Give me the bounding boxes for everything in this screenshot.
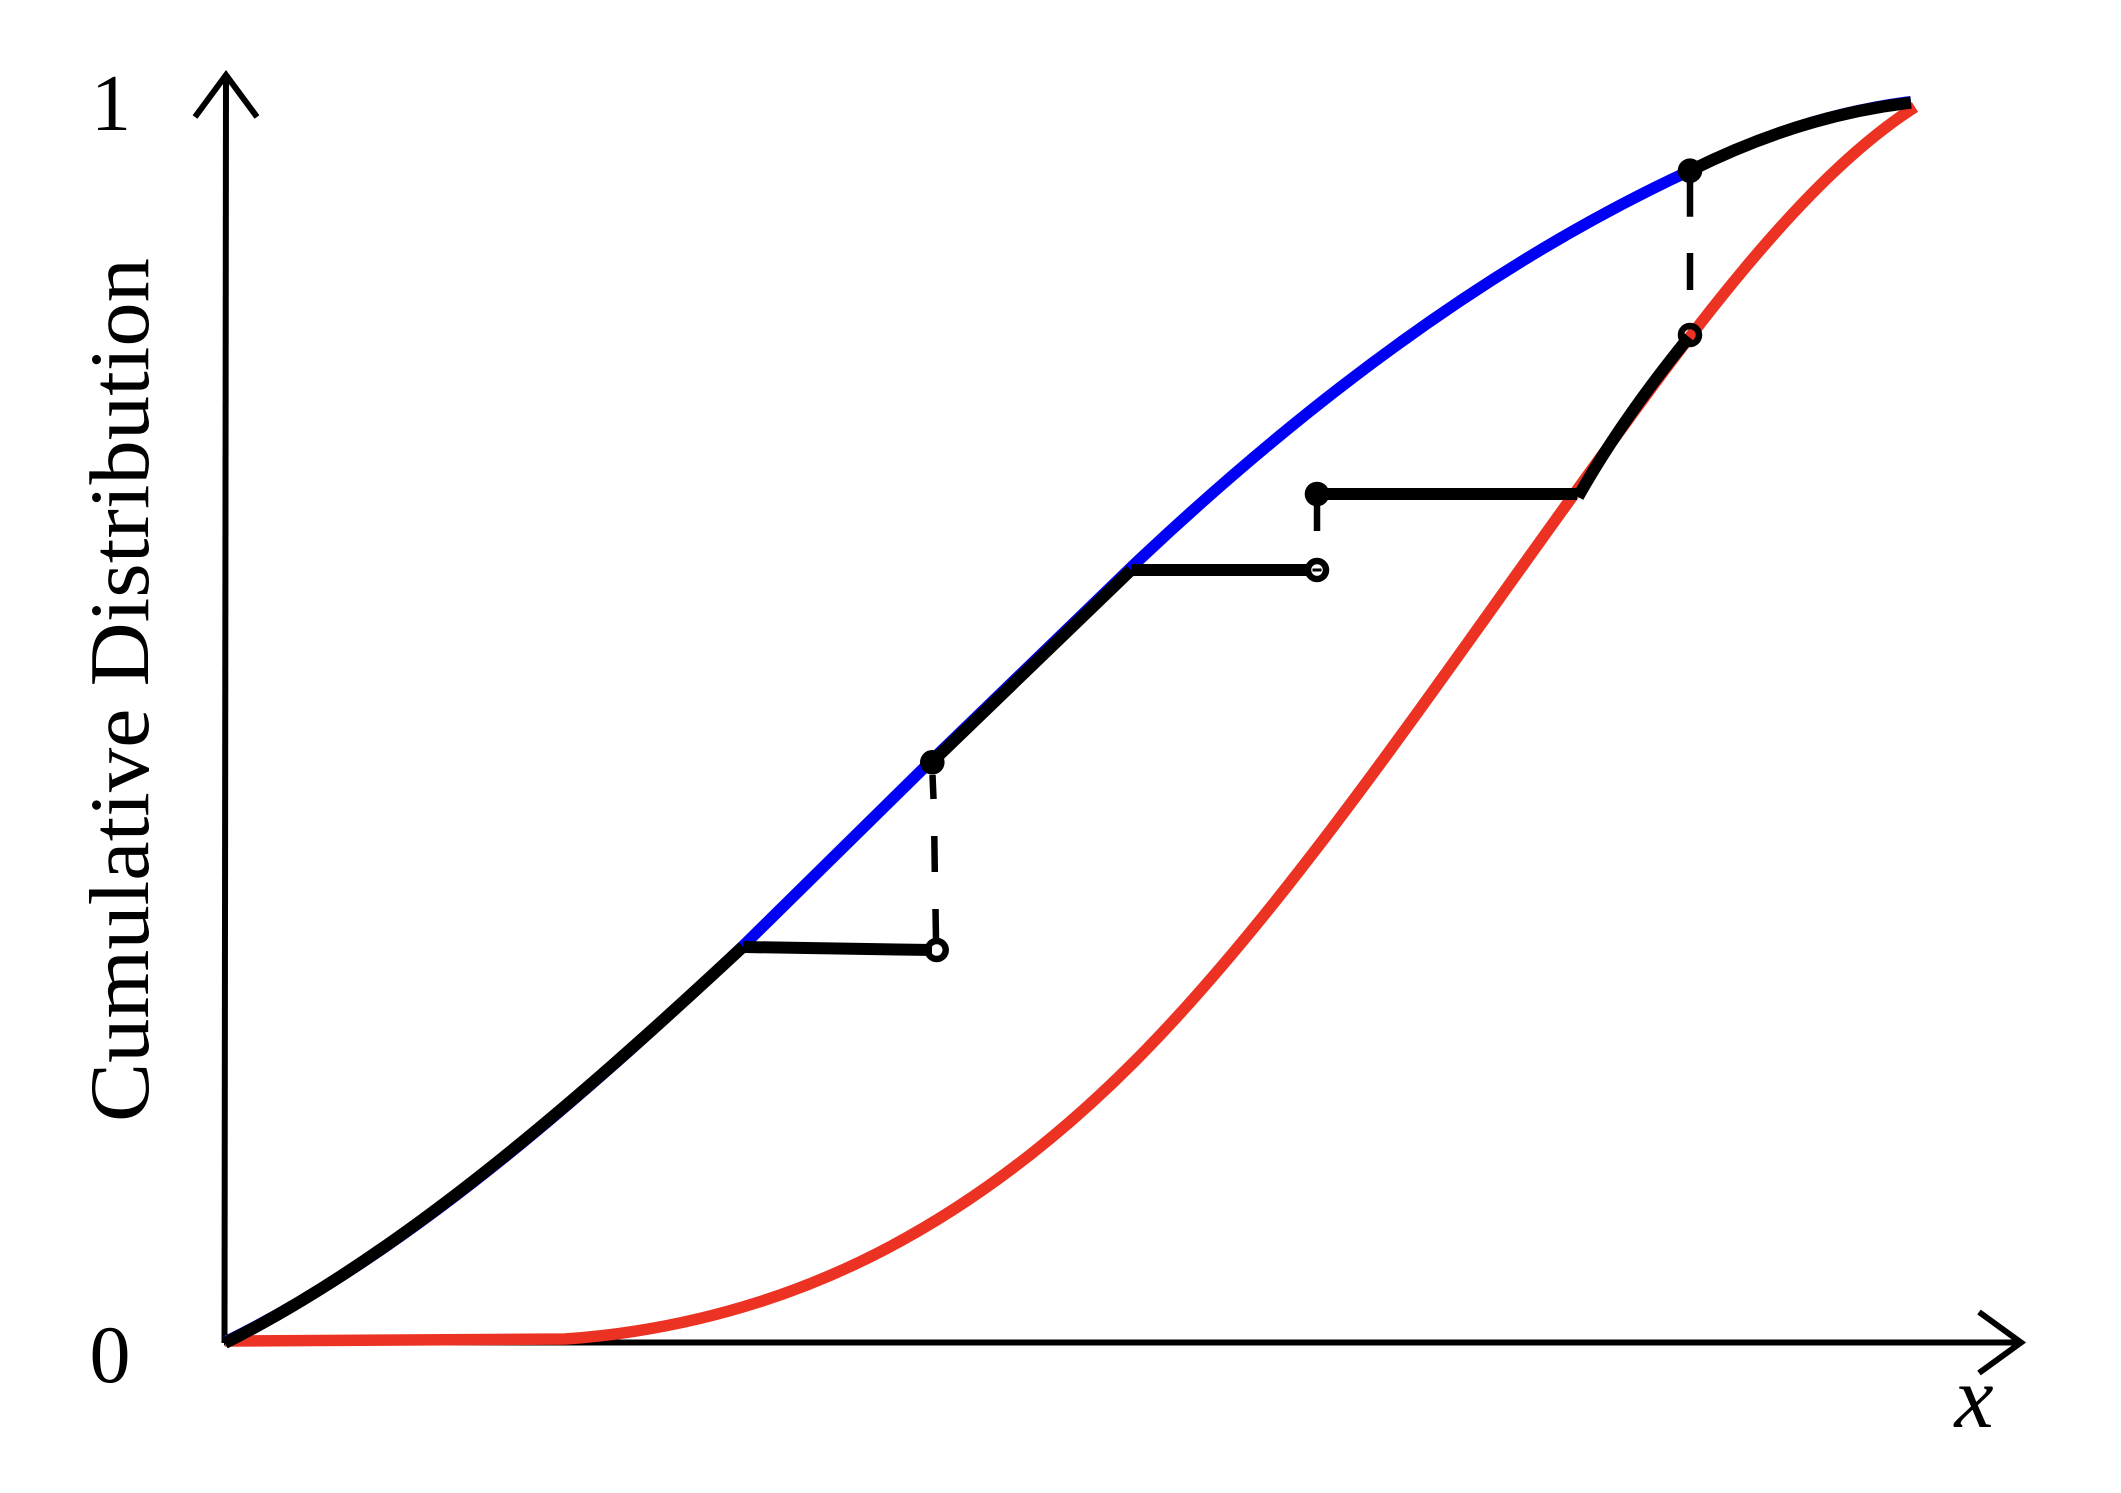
segment 1 following blue curve (225, 947, 743, 1343)
open dots (928, 326, 1699, 959)
segment 3 following red curve (1578, 337, 1689, 497)
black step function (225, 103, 1911, 1343)
horizontal segment 1 (743, 947, 932, 950)
filled dots (920, 158, 1702, 775)
horizontal segment 2 (1131, 564, 1307, 576)
y axis title: Cumulative Distribution (73, 258, 167, 1122)
horizontal segment 3 (1317, 488, 1577, 500)
y tick label 0: 0 (90, 1309, 130, 1400)
segment 2 following blue curve (932, 570, 1131, 762)
y tick label 1: 1 (91, 60, 131, 148)
red distribution curve (225, 107, 1915, 1341)
x axis label: x (1952, 1350, 1994, 1447)
dashed jump connectors (932, 180, 1690, 940)
y axis arrow (195, 75, 257, 1343)
blue distribution curve (225, 102, 1911, 1342)
segment 4 following blue curve (1690, 103, 1911, 171)
x axis arrow (224, 1312, 2021, 1373)
